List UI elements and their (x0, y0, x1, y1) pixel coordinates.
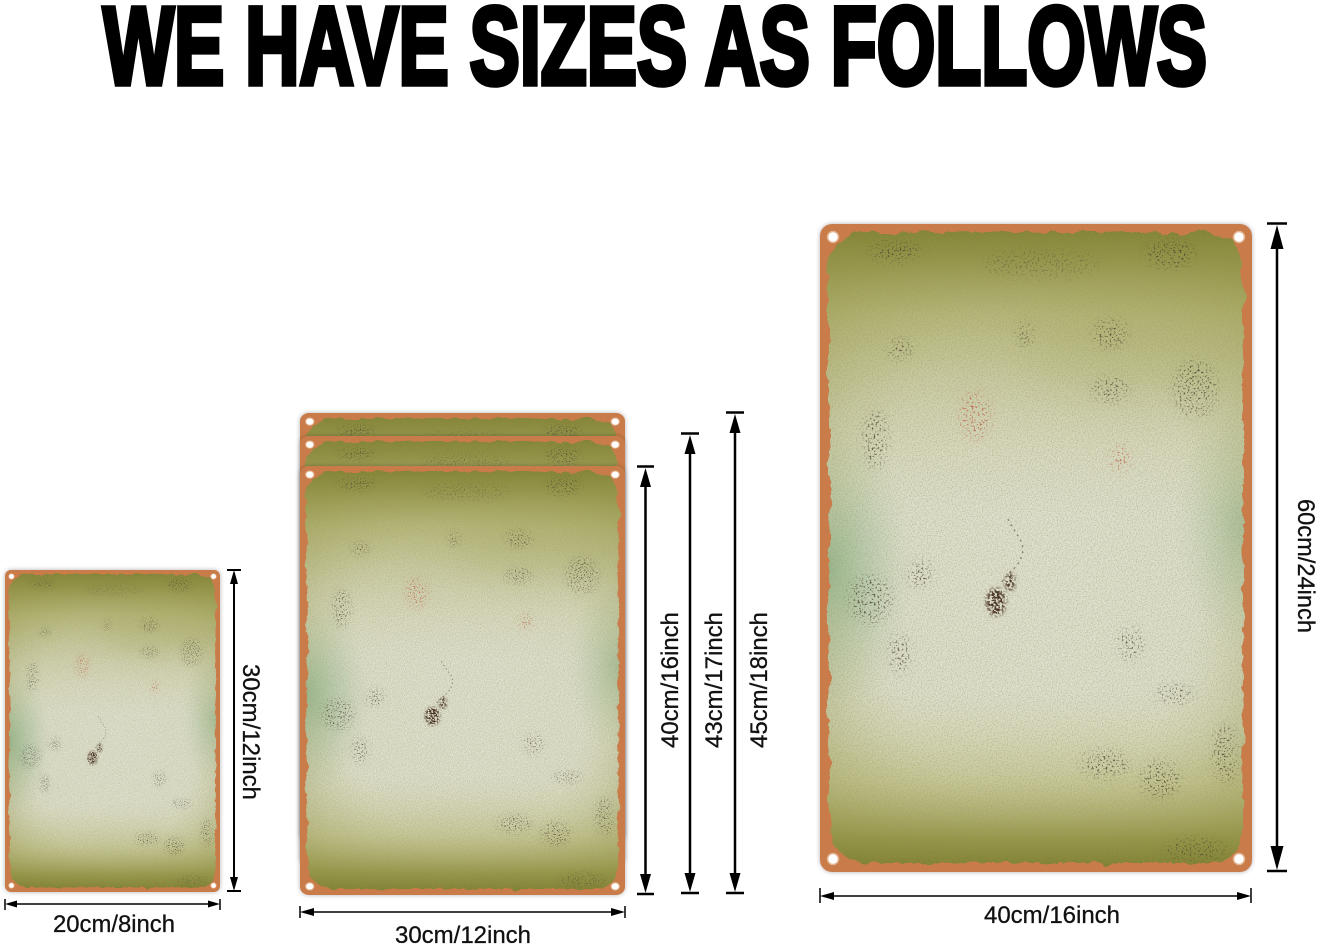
width label: 40cm/16inch (984, 902, 1120, 929)
label 43cm: 43cm/17inch (701, 612, 728, 748)
height dimension arrow 30cm (227, 570, 241, 891)
height label: 30cm/12inch (237, 664, 264, 800)
width label: 20cm/8inch (53, 911, 175, 938)
width dimension arrow 20cm (5, 899, 220, 910)
label 40cm: 40cm/16inch (657, 612, 684, 748)
back plate 45cm (242, 413, 672, 842)
front plate 40cm (242, 466, 672, 895)
width arrow 30cm (300, 906, 625, 918)
small sign: 20×30 cm (0, 570, 264, 938)
sign plate small (0, 570, 251, 892)
large sign: 40×60 cm (743, 224, 1318, 929)
middle plate 43cm (242, 436, 672, 865)
height arrow 60cm (1267, 224, 1287, 871)
sign plate large (743, 224, 1315, 872)
width arrow 40cm (820, 888, 1251, 903)
height arrow 43cm (681, 434, 699, 893)
label 45cm: 45cm/18inch (746, 612, 773, 748)
medium signs: three stacked sizes (242, 412, 773, 948)
height arrow 45cm (726, 412, 744, 893)
height arrow 40cm (637, 466, 654, 894)
